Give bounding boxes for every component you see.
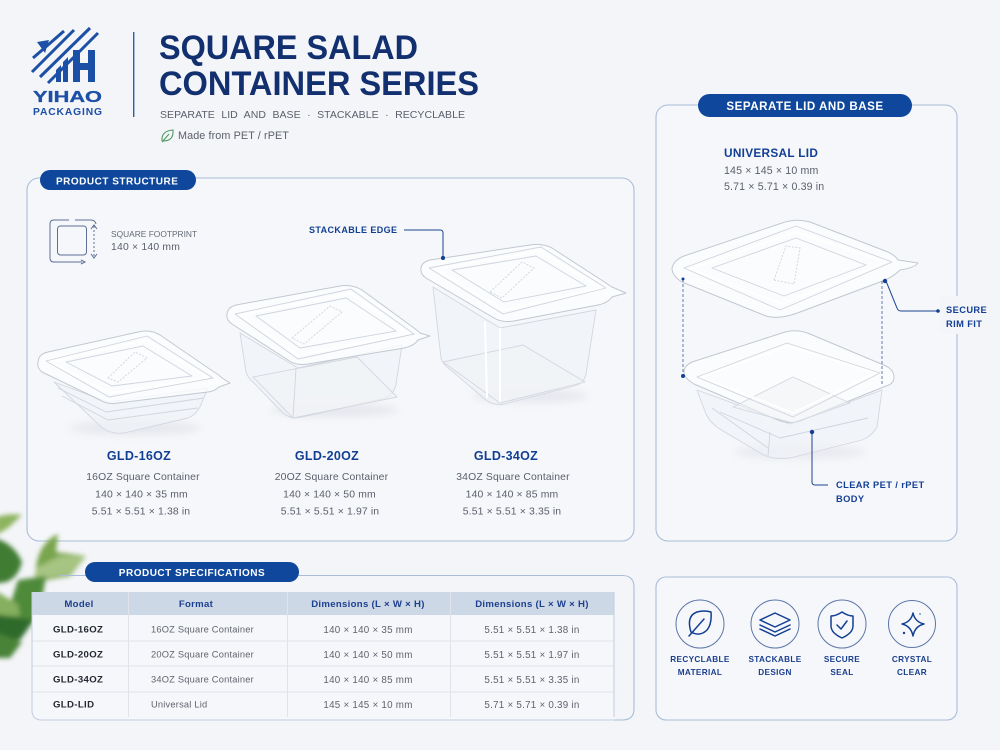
row: GLD-34OZ: 34OZ Square Container <box>151 674 254 684</box>
feature: stackable design: STACKABLE <box>748 655 802 664</box>
row: GLD-34OZ: GLD-34OZ <box>53 674 103 686</box>
footprint label: SQUARE FOOTPRINT <box>111 229 197 239</box>
row: GLD-16OZ: 16OZ Square Container <box>151 624 254 634</box>
title: SQUARE SALAD <box>159 29 418 67</box>
container caption: GLD-34OZ: 5.51 × 5.51 × 3.35 in <box>463 506 561 518</box>
panel: separate lid and base <box>656 94 990 541</box>
feature: crystal clear <box>888 600 936 677</box>
specifications table <box>32 592 614 720</box>
container caption: GLD-20OZ: 20OZ Square Container <box>275 472 389 483</box>
row: GLD-LID: 5.71 × 5.71 × 0.39 in <box>484 700 580 711</box>
callout: clear PET body: CLEAR PET / rPET <box>836 480 925 490</box>
container caption: GLD-20OZ: GLD-20OZ <box>295 449 359 463</box>
feature: recyclable material <box>670 600 730 677</box>
row: GLD-20OZ: 140 × 140 × 50 mm <box>323 650 413 661</box>
table header: Format <box>179 599 214 610</box>
row: GLD-16OZ: 140 × 140 × 35 mm <box>323 625 413 636</box>
feature: recyclable material: RECYCLABLE <box>670 655 730 664</box>
row: GLD-20OZ: 5.51 × 5.51 × 1.97 in <box>484 650 580 661</box>
container caption: GLD-16OZ <box>86 449 200 518</box>
callout: secure rim fit: SECURE <box>946 305 987 315</box>
row: GLD-LID: GLD-LID <box>53 700 94 710</box>
alignment guide lines <box>681 278 882 385</box>
row: GLD-16OZ: GLD-16OZ <box>53 624 103 636</box>
header divider <box>133 32 134 117</box>
table header: Model <box>64 599 94 610</box>
container caption: GLD-34OZ <box>456 449 570 518</box>
container caption: GLD-16OZ: GLD-16OZ <box>107 449 171 463</box>
footprint label: 140 × 140 mm <box>111 242 180 253</box>
container caption: GLD-16OZ: 16OZ Square Container <box>86 472 200 483</box>
container caption: GLD-34OZ: 140 × 140 × 85 mm <box>466 490 558 500</box>
feature: secure seal: SEAL <box>830 668 854 677</box>
row: GLD-LID: Universal Lid <box>151 700 207 710</box>
container caption: GLD-34OZ: GLD-34OZ <box>474 449 538 463</box>
panel: features <box>656 577 957 720</box>
heading: product specifications <box>85 562 299 582</box>
feature: crystal clear: CRYSTAL <box>892 655 932 664</box>
container: GLD-34OZ <box>421 244 626 404</box>
panel: product specifications <box>32 562 634 720</box>
callout: clear PET body: BODY <box>836 494 865 504</box>
feature: stackable design <box>748 600 802 677</box>
feature: crystal clear: CLEAR <box>897 668 927 677</box>
heading: separate lid and base: SEPARATE LID AND BASE <box>726 100 884 113</box>
feature: stackable design: DESIGN <box>758 668 792 677</box>
title: CONTAINER SERIES <box>159 65 479 103</box>
container caption: GLD-20OZ: 140 × 140 × 50 mm <box>283 490 376 500</box>
container caption: GLD-20OZ: 5.51 × 5.51 × 1.97 in <box>281 506 379 518</box>
row: GLD-34OZ: 140 × 140 × 85 mm <box>323 675 413 686</box>
row: GLD-34OZ: 5.51 × 5.51 × 3.35 in <box>484 675 580 686</box>
row: GLD-20OZ: 20OZ Square Container <box>151 650 254 660</box>
logo: Yihao Packaging <box>32 28 102 118</box>
feature: secure seal: SECURE <box>824 655 860 664</box>
container caption: GLD-16OZ: 5.51 × 5.51 × 1.38 in <box>92 506 190 518</box>
container caption: GLD-20OZ <box>275 449 389 518</box>
subtitle: SEPARATE LID AND BASE · STACKABLE · RECYCLABLE <box>160 109 465 121</box>
callout: secure rim fit: RIM FIT <box>946 319 982 329</box>
icon: square footprint <box>50 220 97 264</box>
row: GLD-16OZ <box>53 624 580 636</box>
table header <box>64 599 589 610</box>
universal lid text: UNIVERSAL LID <box>724 146 818 160</box>
universal lid text <box>724 146 824 193</box>
callout: secure rim fit <box>883 279 990 334</box>
container caption: GLD-16OZ: 140 × 140 × 35 mm <box>95 490 188 500</box>
row: GLD-20OZ <box>53 650 580 661</box>
logo: Yihao Packaging: PACKAGING <box>33 107 102 118</box>
heading: product structure: PRODUCT STRUCTURE <box>56 176 178 187</box>
title <box>159 29 479 103</box>
container: GLD-16OZ <box>38 331 230 435</box>
feature: secure seal <box>818 600 866 677</box>
material note with leaf icon: Made from PET / rPET <box>178 130 289 142</box>
universal lid text: 5.71 × 5.71 × 0.39 in <box>724 181 824 193</box>
callout: clear PET body <box>810 430 925 504</box>
table header: Dimensions (L × W × H) <box>311 599 425 610</box>
universal lid text: 145 × 145 × 10 mm <box>724 165 818 177</box>
row: GLD-LID: 145 × 145 × 10 mm <box>323 700 413 711</box>
container caption: GLD-34OZ: 34OZ Square Container <box>456 472 570 483</box>
row: GLD-34OZ <box>53 674 580 686</box>
callout: stackable edge <box>309 225 445 260</box>
row: GLD-16OZ: 5.51 × 5.51 × 1.38 in <box>484 625 580 636</box>
logo: Yihao Packaging: YIHAO <box>33 89 102 106</box>
exploded base <box>684 331 894 459</box>
heading: product structure <box>40 170 196 190</box>
feature: recyclable material: MATERIAL <box>678 668 722 677</box>
heading: product specifications: PRODUCT SPECIFICATIONS <box>119 568 265 579</box>
table header: Dimensions (L × W × H) <box>475 599 589 610</box>
container: GLD-20OZ <box>227 286 430 418</box>
heading: separate lid and base <box>698 94 912 117</box>
callout: stackable edge: STACKABLE EDGE <box>309 225 397 235</box>
row: GLD-20OZ: GLD-20OZ <box>53 650 103 660</box>
footprint label <box>111 229 197 253</box>
decorative plant leaves <box>0 514 86 658</box>
row: GLD-LID <box>53 700 580 711</box>
exploded lid <box>672 220 918 317</box>
panel: product structure <box>27 170 634 541</box>
